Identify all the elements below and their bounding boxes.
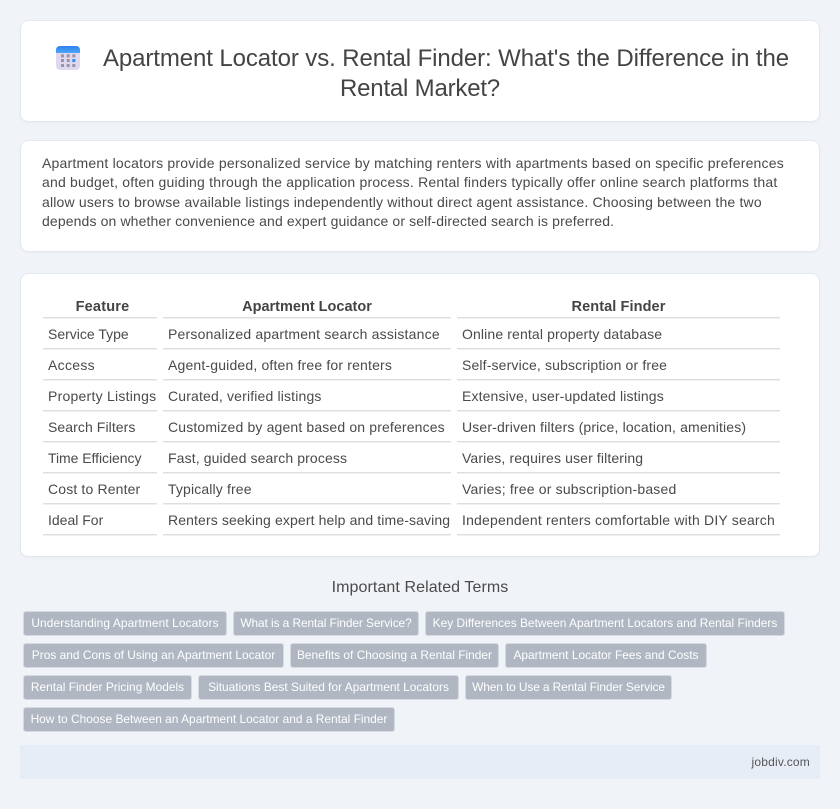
summary text: allow users to browse available listings independently without direct agent assistance. Choosing between the two (42, 194, 762, 210)
table rows: Fast, guided search process (168, 450, 347, 466)
icon: calendar (56, 46, 80, 70)
table rows: Self-service, subscription or free (462, 357, 667, 373)
related term tags: Apartment Locator Fees and Costs (513, 648, 699, 662)
comparison table (43, 299, 780, 536)
table rows: Typically free (168, 481, 252, 497)
table header: Feature (76, 299, 129, 315)
title: Rental Market? (340, 75, 500, 102)
table rows: Extensive, user-updated listings (462, 388, 664, 404)
title: Apartment Locator vs. Rental Finder: What's the Difference in the (103, 45, 789, 72)
table rows: Time Efficiency (48, 450, 141, 466)
summary text: Apartment locators provide personalized service by matching renters with apartments based on specific preferences (42, 155, 784, 171)
footer bar (20, 745, 820, 779)
table rows: Search Filters (48, 419, 135, 435)
footer text: jobdiv.com (752, 755, 810, 769)
table rows: Cost to Renter (48, 481, 140, 497)
table rows: Independent renters comfortable with DIY search (462, 512, 775, 528)
table rows: Customized by agent based on preferences (168, 419, 445, 435)
related term tags: Rental Finder Pricing Models (31, 680, 184, 694)
related term tags: Benefits of Choosing a Rental Finder (297, 648, 492, 662)
panel: comparison table (20, 273, 820, 557)
related term tags (23, 611, 785, 732)
related term tags: Pros and Cons of Using an Apartment Locator (32, 648, 275, 662)
table rows: Service Type (48, 326, 129, 342)
table header (43, 299, 780, 319)
title (103, 45, 789, 102)
table header: Apartment Locator (242, 299, 372, 315)
table rows: Renters seeking expert help and time-saving (168, 512, 450, 528)
related term tags: Key Differences Between Apartment Locators and Rental Finders (433, 616, 777, 630)
table header: Rental Finder (572, 299, 665, 315)
heading: related terms: Important Related Terms (332, 579, 508, 596)
table rows: Curated, verified listings (168, 388, 322, 404)
related term tags: Understanding Apartment Locators (31, 616, 219, 630)
table rows: Access (48, 357, 95, 373)
summary text: depends on whether convenience and expert guidance or self-directed search is preferred. (42, 213, 614, 229)
table rows: Online rental property database (462, 326, 662, 342)
table rows: Personalized apartment search assistance (168, 326, 440, 342)
related term tags: Situations Best Suited for Apartment Locators (208, 680, 449, 694)
panel: summary (20, 140, 820, 252)
related term tags: How to Choose Between an Apartment Locator and a Rental Finder (31, 712, 387, 726)
table rows (43, 326, 780, 536)
table rows: Agent-guided, often free for renters (168, 357, 392, 373)
table rows: Varies, requires user filtering (462, 450, 643, 466)
table rows: Varies; free or subscription-based (462, 481, 676, 497)
related term tags: When to Use a Rental Finder Service (472, 680, 665, 694)
table rows: Property Listings (48, 388, 156, 404)
panel: title header (20, 20, 820, 122)
table rows: User-driven filters (price, location, amenities) (462, 419, 746, 435)
related term tags: What is a Rental Finder Service? (240, 616, 412, 630)
table rows: Ideal For (48, 512, 103, 528)
summary text (42, 155, 784, 229)
summary text: and budget, often guiding through the application process. Rental finders typically offer online search platforms that (42, 174, 777, 190)
